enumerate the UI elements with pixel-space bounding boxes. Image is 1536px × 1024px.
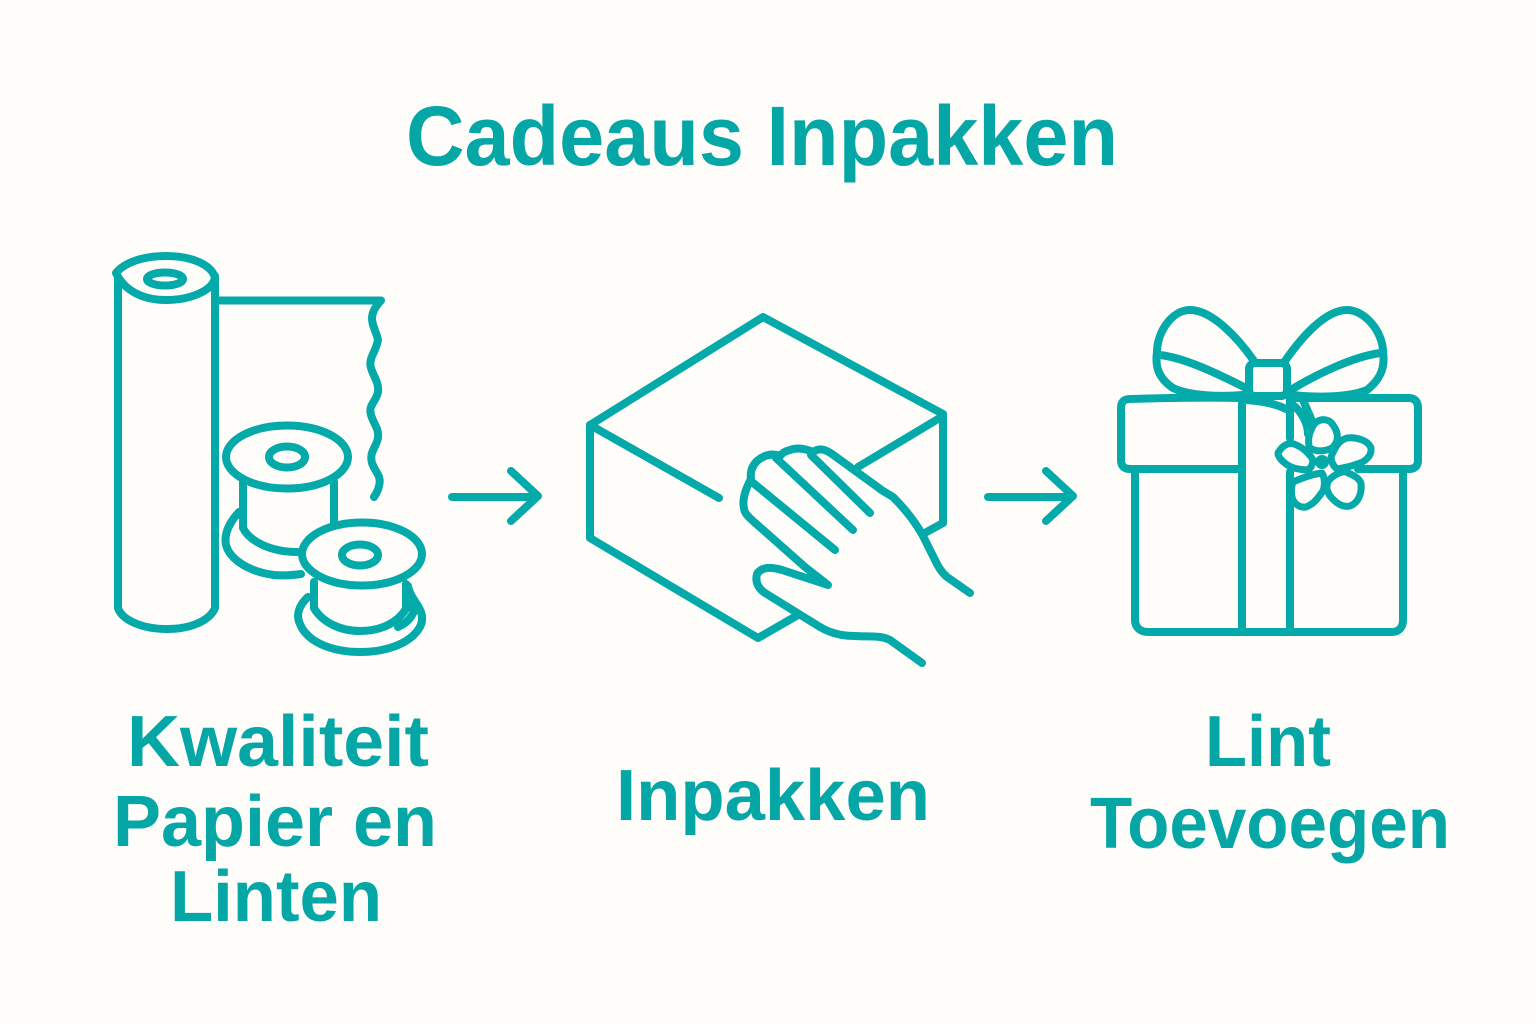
label: Lint Toevoegen: Toevoegen bbox=[1090, 784, 1450, 864]
icon: paper roll and ribbon spools bbox=[116, 256, 422, 652]
label: Lint Toevoegen: Lint bbox=[1205, 702, 1331, 782]
flower petals bbox=[1278, 420, 1371, 507]
box body bbox=[1135, 472, 1403, 632]
label: Kwaliteit Papier en Linten: Linten bbox=[170, 857, 382, 937]
box lid bbox=[1121, 398, 1418, 469]
knot bbox=[1249, 363, 1287, 396]
left bow loop bbox=[1156, 310, 1254, 396]
vertical ribbon bbox=[1242, 398, 1290, 632]
icon: hand wrapping box bbox=[590, 317, 970, 663]
right bow loop bbox=[1285, 310, 1384, 397]
title: Cadeaus Inpakken bbox=[406, 89, 1118, 183]
arrow: step 1 to step 2 bbox=[452, 471, 538, 521]
label: Kwaliteit Papier en Linten: Kwaliteit bbox=[127, 702, 429, 782]
label: Kwaliteit Papier en Linten: Papier en bbox=[113, 782, 437, 862]
label: Lint Toevoegen bbox=[1090, 702, 1450, 864]
label: Inpakken: Inpakken bbox=[616, 756, 930, 836]
icon: gift with ribbon bbox=[1121, 310, 1418, 632]
arrow: step 2 to step 3 bbox=[988, 471, 1073, 521]
label: Kwaliteit Papier en Linten bbox=[113, 702, 437, 937]
